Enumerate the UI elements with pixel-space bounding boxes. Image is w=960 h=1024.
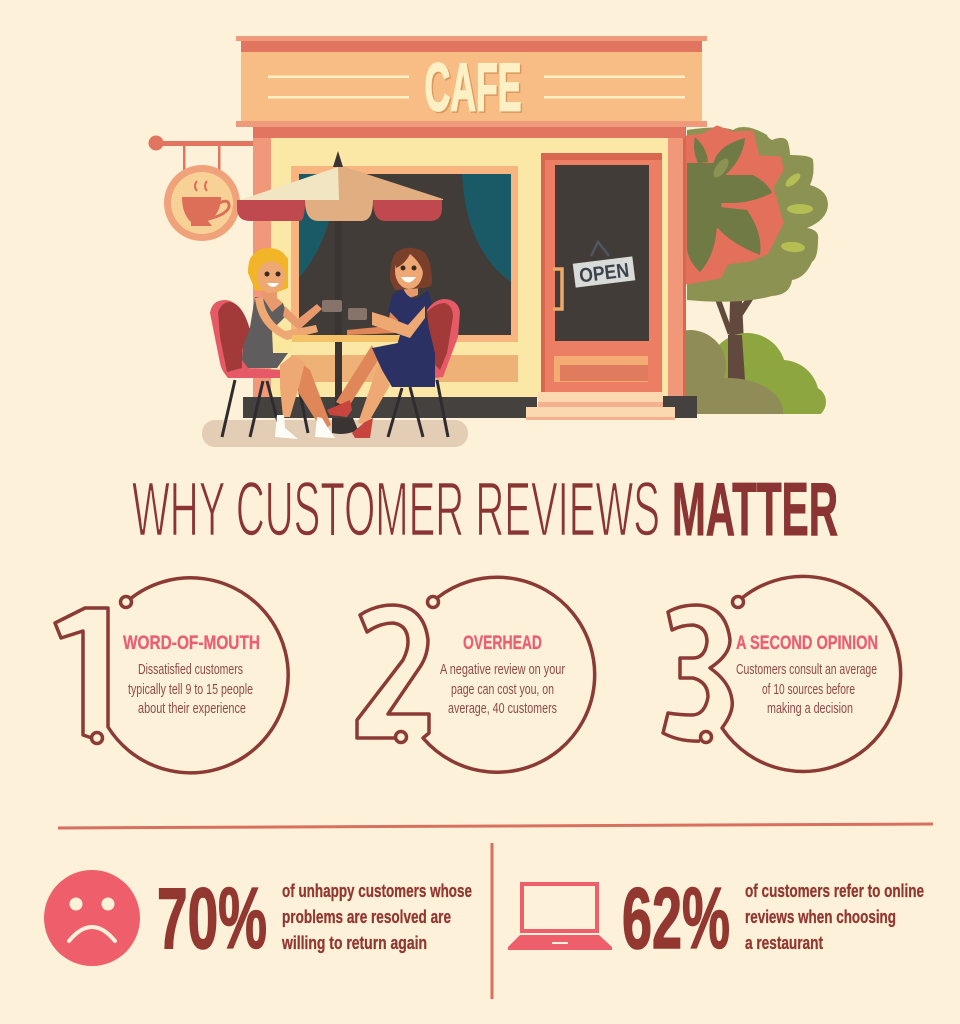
ground shadow bbox=[202, 420, 468, 447]
numeral 1 outline bbox=[55, 578, 288, 773]
description bbox=[745, 881, 924, 953]
dark leaves bbox=[687, 137, 772, 272]
description: average, 40 customers bbox=[448, 701, 557, 717]
description bbox=[128, 662, 253, 717]
percentage: 70% bbox=[157, 871, 267, 967]
open sign bbox=[573, 242, 635, 288]
heading: WORD-OF-MOUTH bbox=[123, 633, 260, 654]
woman: right bbox=[327, 248, 435, 438]
description: about their experience bbox=[138, 701, 246, 717]
description: Customers consult an average bbox=[736, 662, 877, 678]
description: a restaurant bbox=[745, 933, 823, 953]
description: of 10 sources before bbox=[762, 682, 855, 698]
woman: left bbox=[242, 248, 342, 439]
icon: laptop bbox=[508, 884, 612, 950]
icon: sad face bbox=[44, 870, 140, 966]
description: willing to return again bbox=[281, 933, 427, 953]
description bbox=[736, 662, 877, 717]
description bbox=[440, 662, 565, 717]
door bbox=[541, 153, 662, 392]
base and steps bbox=[243, 392, 697, 420]
percentage: 62% bbox=[622, 871, 730, 967]
description bbox=[281, 881, 472, 953]
table top bbox=[292, 335, 400, 342]
panel: word of mouth bbox=[55, 578, 288, 773]
tree bbox=[686, 126, 828, 414]
heading: A SECOND OPINION bbox=[736, 633, 878, 654]
open sign: OPEN bbox=[578, 260, 630, 287]
window bbox=[291, 166, 518, 382]
cafe sign text bbox=[424, 50, 523, 127]
icon: coffee cup bbox=[182, 181, 229, 226]
description: problems are resolved are bbox=[282, 907, 451, 927]
chair: left bbox=[210, 300, 308, 437]
cafe sign text: CAFE bbox=[426, 51, 523, 127]
description: reviews when choosing bbox=[745, 907, 896, 927]
stat: 70 percent bbox=[44, 870, 472, 967]
description: page can cost you, on bbox=[451, 682, 554, 698]
stat: 62 percent bbox=[508, 871, 924, 967]
chair: right bbox=[388, 299, 460, 437]
heading: OVERHEAD bbox=[463, 633, 542, 654]
cafe building bbox=[236, 36, 707, 420]
hanging cup sign bbox=[148, 136, 253, 241]
panel: overhead bbox=[357, 577, 595, 772]
description: A negative review on your bbox=[440, 662, 565, 678]
panel: a second opinion bbox=[663, 576, 901, 771]
description: making a decision bbox=[767, 701, 853, 717]
numeral 2 outline bbox=[357, 577, 595, 772]
umbrella and table bbox=[237, 151, 443, 434]
description: of unhappy customers whose bbox=[282, 881, 472, 901]
illustration: cafe scene bbox=[148, 36, 828, 447]
description: Dissatisfied customers bbox=[138, 662, 243, 678]
cafe sign text: CAFE bbox=[424, 50, 522, 126]
numeral 3 outline bbox=[663, 576, 901, 771]
description: typically tell 9 to 15 people bbox=[128, 682, 253, 698]
